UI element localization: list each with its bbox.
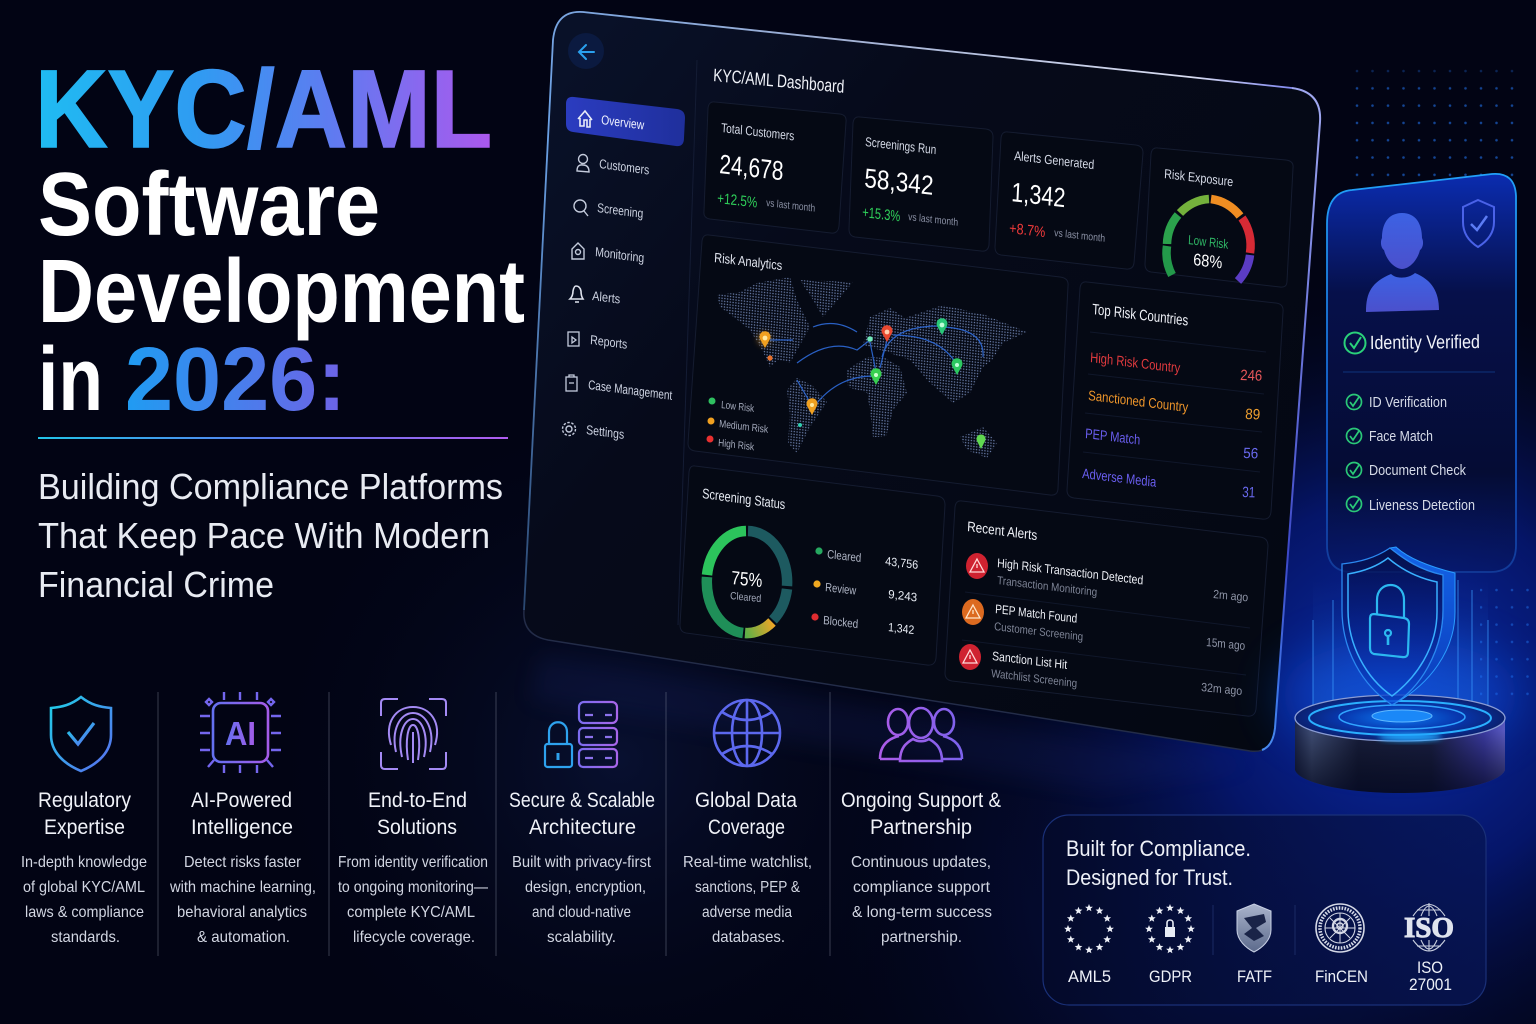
feature: regulatory expertise: Regulatory (38, 789, 131, 812)
badge: GDPR (1145, 904, 1195, 986)
stat card: screenings run: +15.3% (862, 204, 901, 225)
verification checklist: Liveness Detection (1369, 497, 1475, 514)
risk exposure gauge card: 68% (1193, 250, 1223, 272)
badge: ISO 27001 (1404, 903, 1454, 994)
top risk countries panel: 31 (1242, 484, 1256, 501)
feature: ongoing support and partnership: & long-term success (852, 904, 992, 921)
icon: shield with lock (1342, 547, 1455, 705)
identity verified heading: Identity Verified (1370, 332, 1480, 354)
badge: ISO 27001: ISO (1417, 958, 1443, 977)
dashboard heading: KYC/AML Dashboard (713, 65, 845, 97)
title: in (38, 330, 103, 430)
tablet reflection (530, 655, 1250, 790)
alert row 1: Transaction Monitoring (997, 575, 1097, 599)
verification checklist: ID Verification (1369, 394, 1447, 411)
badge: ISO 27001: ISO (1404, 913, 1454, 944)
icon: people (880, 708, 962, 761)
risk exposure gauge card: Low Risk (1188, 232, 1229, 252)
title: Software (38, 155, 380, 255)
hologram shield on platform (1280, 547, 1520, 793)
status legend: 43,756 (885, 554, 919, 572)
stat card: screenings run: vs last month (908, 211, 959, 229)
feature: global data coverage (683, 700, 812, 946)
feature: ongoing support and partnership: Continuous updates, (851, 854, 991, 871)
feature: global data coverage: Real-time watchlist, (683, 854, 812, 871)
feature: end-to-end solutions: From identity verification (338, 854, 488, 871)
recent alerts panel (945, 501, 1268, 716)
compliance badges panel (1043, 815, 1486, 1005)
top risk countries panel: 246 (1240, 367, 1263, 385)
sidebar navigation: Alerts (592, 288, 621, 307)
badge: GDPR: GDPR (1149, 967, 1192, 986)
stat card: screenings run (849, 117, 993, 251)
stat card: total customers: 24,678 (719, 148, 784, 186)
alert row 2 (962, 599, 1246, 653)
feature: regulatory expertise: of global KYC/AML (23, 879, 145, 896)
badge: AML5 (1064, 904, 1114, 986)
identity verification card (1327, 174, 1516, 572)
feature: ai-powered intelligence: & automation. (197, 929, 290, 946)
icon: user silhouette (1366, 213, 1439, 312)
feature: ai-powered intelligence: Intelligence (191, 816, 293, 839)
stat card: screenings run: 58,342 (864, 162, 934, 201)
stat card: total customers: Total Customers (721, 120, 795, 143)
status legend: 9,243 (888, 587, 918, 605)
feature: regulatory expertise: In-depth knowledge (21, 854, 147, 871)
icon: globe (714, 700, 780, 766)
feature: ai-powered intelligence: Detect risks faster (184, 854, 302, 871)
status legend: Cleared (827, 547, 862, 565)
screening status panel: Cleared (730, 590, 762, 605)
feature: secure and scalable architecture (509, 702, 655, 946)
subtitle: That Keep Pace With Modern (38, 515, 490, 556)
sidebar navigation (562, 97, 685, 442)
alert row 2: 15m ago (1206, 635, 1246, 653)
feature: end-to-end solutions: to ongoing monitoring— (338, 879, 488, 896)
status legend: Review (825, 580, 857, 598)
feature: ongoing support and partnership: partnership. (881, 929, 962, 946)
top risk countries panel: Sanctioned Country (1088, 387, 1189, 415)
feature: secure and scalable architecture: scalability. (547, 929, 616, 946)
badge: ISO 27001: 27001 (1409, 975, 1452, 994)
sidebar navigation: Case Management (588, 377, 673, 403)
top risk countries panel: 56 (1243, 445, 1259, 462)
feature: ai-powered intelligence: AI-Powered (191, 789, 292, 812)
alert row 3: Watchlist Screening (991, 668, 1077, 690)
top risk countries panel: Top Risk Countries (1092, 301, 1189, 330)
feature: regulatory expertise: Expertise (44, 816, 125, 839)
feature: secure and scalable architecture: design, encryption, (525, 879, 646, 896)
dashboard tablet (524, 12, 1320, 751)
badge: FinCEN (1315, 904, 1368, 986)
top risk countries panel: 89 (1245, 406, 1261, 423)
feature dividers (158, 692, 830, 956)
feature: regulatory expertise: standards. (51, 929, 120, 946)
panel heading: Built for Compliance. (1066, 836, 1251, 861)
recent alerts panel: Recent Alerts (967, 518, 1038, 543)
feature: ongoing support and partnership: Partnership (870, 816, 972, 839)
top risk countries panel (1067, 282, 1283, 519)
status legend: 1,342 (888, 620, 915, 637)
top risk countries panel: High Risk Country (1090, 349, 1181, 376)
icon: shield check (51, 697, 111, 771)
badge: FATF: FATF (1237, 967, 1272, 986)
alert row 2: Customer Screening (994, 621, 1083, 644)
feature: ongoing support and partnership (841, 708, 1001, 946)
stat card: alerts generated: vs last month (1054, 227, 1106, 245)
verification checklist: Face Match (1369, 428, 1433, 445)
stat card: alerts generated (995, 132, 1143, 269)
stat card: alerts generated: +8.7% (1009, 220, 1046, 241)
alert row 1: High Risk Transaction Detected (997, 556, 1144, 588)
stat card: total customers: +12.5% (717, 190, 758, 212)
stat card: alerts generated: Alerts Generated (1014, 148, 1095, 172)
feature: end-to-end solutions: Solutions (377, 816, 457, 839)
feature: global data coverage: Coverage (708, 816, 785, 839)
risk analytics panel (688, 235, 1068, 495)
feature: secure and scalable architecture: Built with privacy-first (512, 854, 652, 871)
sidebar navigation: Customers (599, 156, 650, 178)
feature: regulatory expertise (21, 697, 147, 946)
subtitle (38, 466, 503, 605)
feature: global data coverage: Global Data (695, 789, 797, 812)
badge: AML5: AML5 (1068, 967, 1111, 986)
feature: end-to-end solutions: complete KYC/AML (347, 904, 475, 921)
sidebar navigation: Monitoring (595, 244, 645, 265)
icon: AI chip: AI (225, 715, 256, 752)
feature: secure and scalable architecture: and cloud-native (532, 904, 631, 921)
screening status panel: Screening Status (702, 485, 786, 512)
sidebar navigation: Reports (590, 332, 628, 352)
panel heading: Designed for Trust. (1066, 865, 1233, 890)
alert row 3: Sanction List Hit (992, 649, 1068, 672)
feature: global data coverage: sanctions, PEP & (695, 879, 800, 896)
icon: lock and servers (545, 702, 617, 767)
world map (717, 277, 1027, 458)
platform (1295, 695, 1505, 793)
badge: FinCEN: FinCEN (1315, 967, 1368, 986)
feature: ai-powered intelligence (169, 692, 316, 946)
feature: end-to-end solutions (338, 699, 488, 946)
risk exposure gauge card (1145, 148, 1293, 287)
verification checklist (1346, 394, 1475, 514)
sidebar navigation: Overview (601, 112, 645, 133)
stat card: screenings run: Screenings Run (865, 134, 937, 157)
feature: ongoing support and partnership: Ongoing Support & (841, 789, 1001, 812)
alert row 3: 32m ago (1201, 680, 1243, 698)
feature: secure and scalable architecture: Architecture (529, 816, 636, 839)
screening status panel (680, 466, 945, 665)
alert row 3 (959, 644, 1243, 698)
feature: regulatory expertise: laws & compliance (25, 904, 144, 921)
top risk countries panel: PEP Match (1085, 425, 1141, 448)
feature: secure and scalable architecture: Secure & Scalable (509, 789, 655, 812)
title (35, 48, 525, 430)
feature: global data coverage: databases. (712, 929, 785, 946)
sidebar navigation: Settings (586, 422, 625, 442)
title: Development (38, 242, 525, 342)
risk analytics panel: Risk Analytics (714, 250, 783, 273)
status legend: Blocked (823, 613, 859, 631)
back button (568, 33, 604, 69)
title: KYC/AML (35, 48, 492, 171)
feature: ongoing support and partnership: compliance support (853, 879, 991, 896)
map legend: High Risk (718, 437, 755, 453)
map legend: Medium Risk (719, 418, 769, 436)
top risk countries panel: Adverse Media (1082, 465, 1157, 490)
subtitle: Financial Crime (38, 564, 274, 605)
panel heading (1066, 836, 1251, 890)
feature: ai-powered intelligence: behavioral analytics (177, 904, 307, 921)
status legend (811, 547, 919, 637)
feature: global data coverage: adverse media (702, 904, 792, 921)
map legend (706, 398, 769, 453)
stat card: alerts generated: 1,342 (1011, 176, 1066, 213)
feature: end-to-end solutions: End-to-End (368, 789, 467, 812)
screening status panel: 75% (731, 568, 763, 592)
icon: fingerprint (381, 699, 446, 769)
icon: AI chip (200, 692, 281, 773)
subtitle: Building Compliance Platforms (38, 466, 503, 507)
stat card: total customers (704, 102, 846, 233)
icon: small shield check (1463, 200, 1494, 247)
donut chart (707, 531, 787, 633)
feature: end-to-end solutions: lifecycle coverage. (353, 929, 475, 946)
risk exposure gauge card: Risk Exposure (1164, 166, 1234, 189)
verification checklist: Document Check (1369, 462, 1466, 479)
title: 2026: (125, 330, 346, 430)
map legend: Low Risk (721, 399, 755, 415)
badge: FATF (1237, 904, 1272, 986)
alert row 1: 2m ago (1213, 587, 1249, 605)
alert row 2: PEP Match Found (995, 602, 1078, 626)
stat card: total customers: vs last month (766, 197, 816, 215)
sidebar navigation: Screening (597, 200, 644, 221)
feature: ai-powered intelligence: with machine learning, (169, 879, 316, 896)
alert row 1 (966, 553, 1249, 605)
